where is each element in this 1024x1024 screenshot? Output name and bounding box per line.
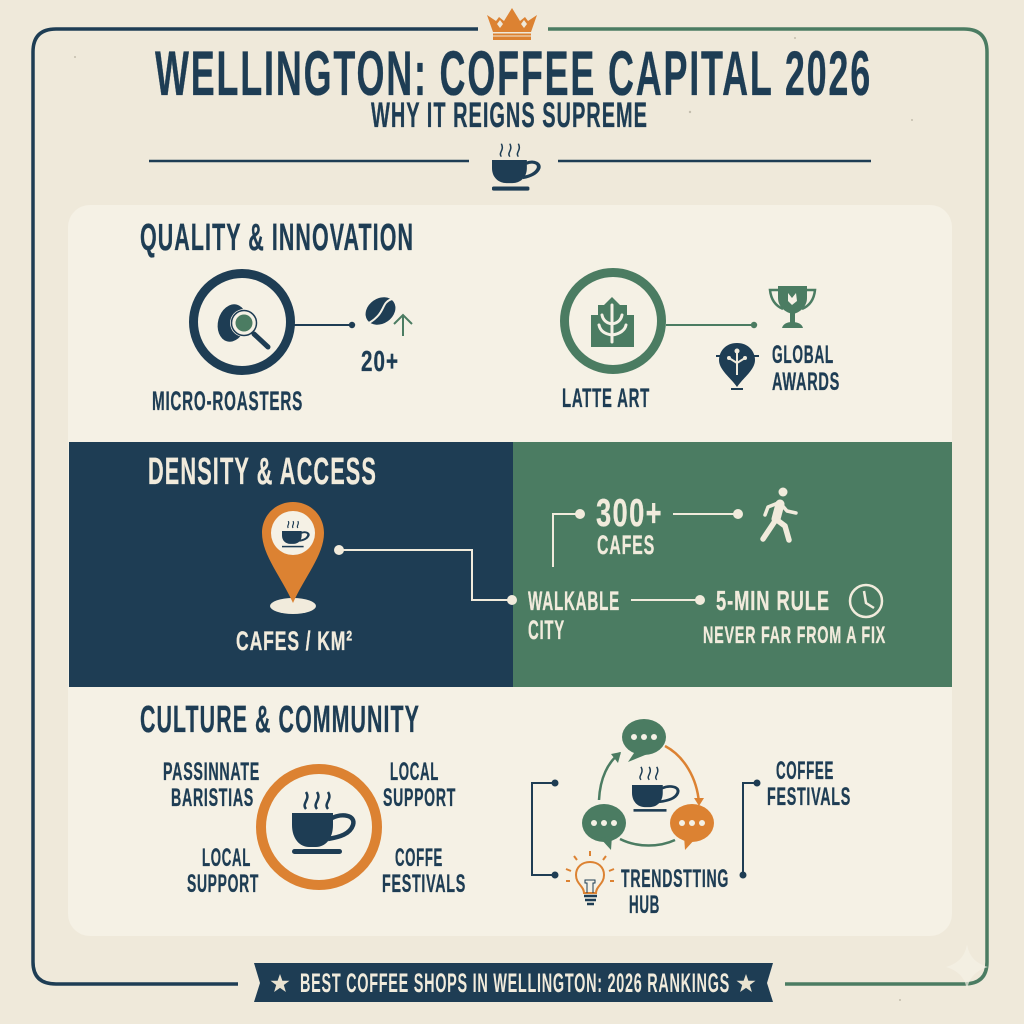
label: global awards: AWARDS [772, 368, 840, 396]
label: local support top [383, 758, 456, 812]
label: 5-min rule: 5-MIN RULE [716, 585, 830, 616]
icon: left star [270, 974, 290, 992]
diagram: conversation cycle [582, 719, 714, 850]
label: micro-roasters: MICRO-ROASTERS [152, 386, 303, 416]
stat: 300+: 300+ [596, 492, 663, 535]
panel: density navy [69, 442, 513, 687]
label: passionate baristas [163, 758, 260, 812]
label: passionate baristas: BARISTIAS [171, 784, 254, 812]
icon: trophy [770, 286, 815, 328]
label: local support bottom [187, 844, 259, 898]
panel: quality and innovation [140, 217, 840, 416]
label: local support top: LOCAL [390, 758, 439, 786]
label: coffee festivals right: FESTIVALS [767, 783, 851, 811]
label: global awards: GLOBAL [772, 341, 834, 369]
label: local support bottom: LOCAL [202, 844, 251, 872]
icon: walking person [763, 488, 796, 540]
connector: micro-roasters [294, 322, 355, 328]
label: coffee festivals: COFFE [395, 844, 443, 872]
icon: orange ring with cup [261, 769, 377, 885]
bracket: right [740, 780, 760, 878]
connector: walkable to 300+ [553, 509, 585, 567]
heading: quality and innovation: QUALITY & INNOVATION [140, 217, 414, 259]
label: walkable city [528, 586, 620, 645]
subtitle: WHY IT REIGNS SUPREME [371, 96, 648, 135]
connector: latte art [666, 322, 757, 328]
label: local support bottom: SUPPORT [187, 870, 259, 898]
icon: sparkle [946, 944, 988, 990]
label: walkable city: WALKABLE [528, 586, 620, 616]
label: trendsetting hub: HUB [629, 891, 660, 919]
connector: walkable to 5-min rule [631, 595, 705, 605]
panel: culture and community [140, 699, 851, 919]
label: coffee festivals right: COFFEE [776, 757, 834, 785]
icon: light bulb [566, 851, 614, 904]
label: latte art: LATTE ART [562, 383, 650, 413]
panel: main background [68, 205, 952, 936]
icon: location pin with cup [262, 502, 324, 614]
label: trendsetting hub [621, 865, 729, 919]
banner: rankings [254, 963, 773, 1002]
heading: density and access: DENSITY & ACCESS [148, 451, 377, 493]
label: global awards [772, 341, 840, 396]
label: coffee festivals right [767, 757, 851, 811]
label: local support top: SUPPORT [383, 784, 456, 812]
icon: clock [850, 585, 882, 617]
label: cafes per km2: CAFES / KM² [236, 626, 353, 656]
icon: right star [736, 974, 756, 992]
label: passionate baristas: PASSINNATE [163, 758, 260, 786]
bracket: left [532, 780, 558, 878]
connector: pin to walkable city [334, 545, 517, 605]
icon: crown [487, 8, 537, 40]
icon: navy idea pin [716, 343, 759, 389]
heading: culture and community: CULTURE & COMMUNITY [140, 699, 420, 741]
label: walkable city: CITY [528, 615, 565, 645]
stat: 20+: 20+ [361, 346, 399, 378]
icon: header coffee cup [492, 144, 539, 191]
icon: magnifier over bean in ring [194, 274, 290, 370]
icon: up arrow [394, 315, 412, 336]
label: trendsetting hub: TRENDSTTING [621, 865, 729, 893]
label: coffee festivals [382, 844, 466, 898]
icon: latte art leaf in ring [564, 272, 662, 370]
label: coffee festivals: FESTIVALS [382, 870, 466, 898]
panel: access green [513, 442, 952, 687]
icon: coffee bean [360, 292, 401, 330]
label: never far from a fix: NEVER FAR FROM A FIX [703, 622, 886, 649]
label: cafes: CAFES [597, 530, 655, 560]
connector: 300+ to walker [673, 509, 743, 519]
